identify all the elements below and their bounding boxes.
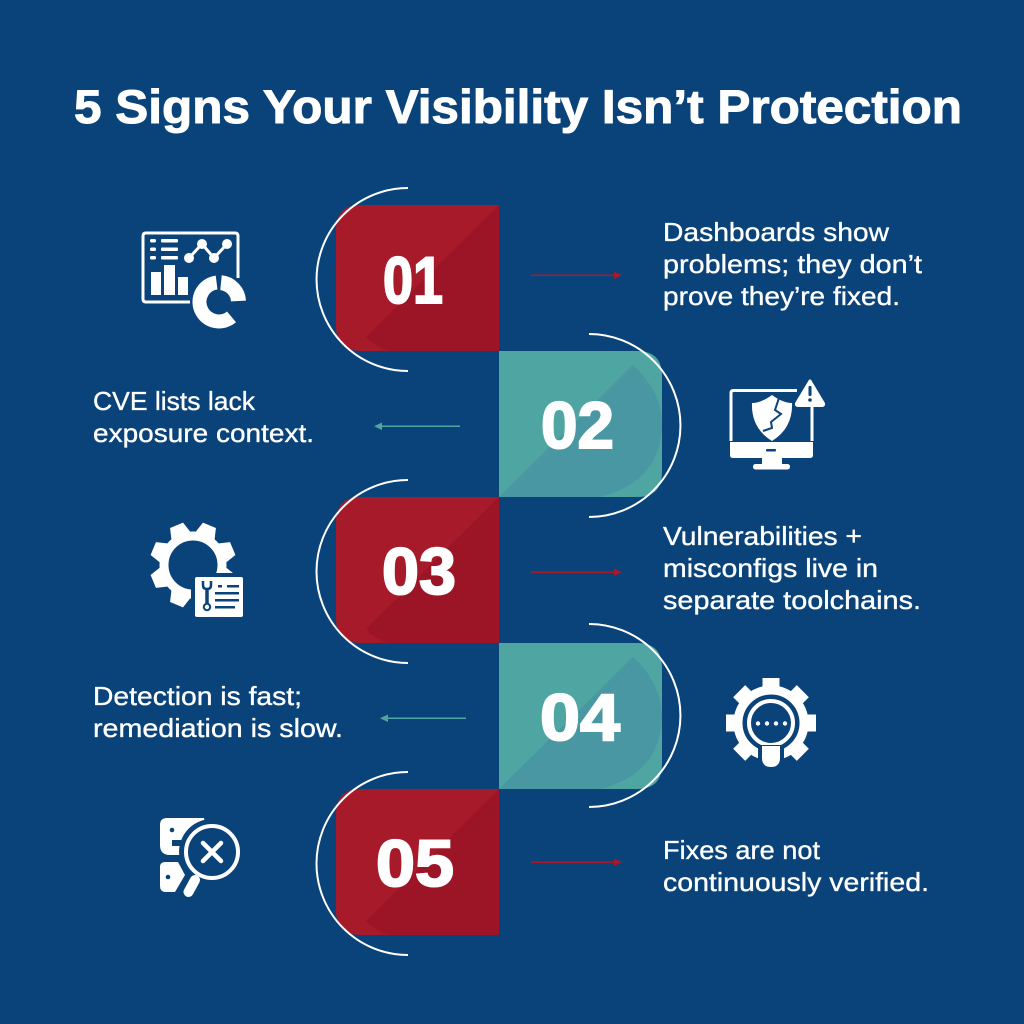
- arc 04: [589, 624, 680, 807]
- step 04 block: 04: [540, 680, 620, 754]
- text: sign 1: Dashboards show: [663, 217, 889, 247]
- title: 5 Signs Your Visibility Isn’t Protection: [74, 80, 962, 133]
- text: sign 1: problems; they don’t: [663, 249, 923, 279]
- step 01 block: [336, 205, 499, 351]
- icon: dashboard with charts: [143, 233, 238, 321]
- step 03 block: [336, 497, 499, 643]
- icon: gear with magnifier: [726, 678, 816, 767]
- text: sign 5: [663, 835, 929, 897]
- text: sign 4: [93, 681, 343, 743]
- text: sign 4: Detection is fast;: [93, 681, 302, 711]
- step 02 block: [499, 351, 662, 497]
- arc 02: [589, 334, 680, 517]
- arrow 01: [531, 272, 622, 279]
- step 01 block: 01: [383, 243, 443, 317]
- text: sign 3: misconfigs live in: [663, 553, 878, 583]
- step 03 block: 03: [382, 534, 456, 608]
- arc 05: [316, 772, 408, 955]
- step 05 block: 05: [376, 826, 454, 900]
- arrow 03: [531, 568, 622, 576]
- step 02 block: 02: [541, 388, 614, 462]
- text: sign 4: remediation is slow.: [93, 713, 343, 743]
- icon: monitor with broken shield and warning: [730, 381, 824, 470]
- text: sign 2: CVE lists lack: [93, 386, 256, 416]
- arc 03: [316, 480, 408, 663]
- text: sign 2: [93, 386, 314, 448]
- text: sign 5: continuously verified.: [663, 867, 929, 897]
- text: sign 2: exposure context.: [93, 418, 314, 448]
- step 04 block: [499, 643, 662, 789]
- icon: gear with wrench checklist: [149, 521, 247, 621]
- text: sign 3: Vulnerabilities +: [663, 521, 862, 551]
- text: sign 3: [663, 521, 921, 615]
- step 05 block: [336, 789, 499, 935]
- icon: tags with magnifier x: [160, 818, 245, 892]
- arrow 02: [374, 422, 460, 430]
- text: sign 1: prove they’re fixed.: [663, 281, 900, 311]
- text: sign 5: Fixes are not: [663, 835, 821, 865]
- text: sign 1: [663, 217, 923, 311]
- text: sign 3: separate toolchains.: [663, 585, 921, 615]
- arrow 04: [380, 714, 466, 722]
- arrow 05: [531, 858, 622, 866]
- arc 01: [317, 188, 408, 371]
